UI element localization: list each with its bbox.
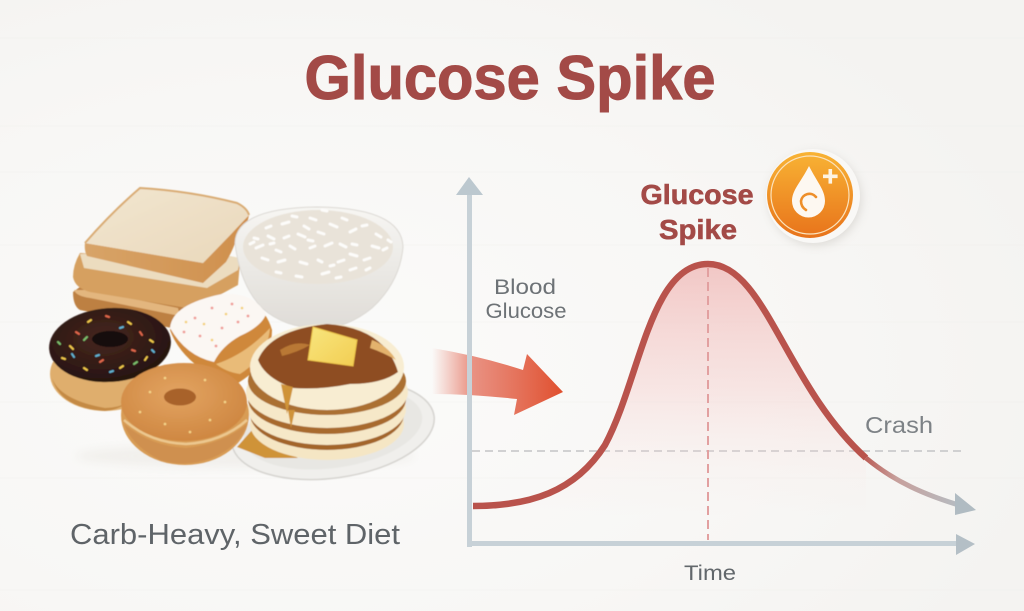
food illustration: carb-heavy foods [47, 188, 441, 492]
syrup on top [258, 324, 398, 388]
title: Glucose Spike [304, 44, 716, 113]
icon: glucose drop badge [766, 149, 861, 245]
peak dashed line [707, 268, 709, 540]
label: Glucose Spike peak: Glucose [640, 179, 754, 210]
chart: blood glucose curve [456, 177, 976, 585]
food: glazed donut [121, 363, 249, 465]
food: sprinkled white donut [170, 294, 272, 383]
food: stacked bread slices [73, 188, 249, 329]
food: bowl of rice [235, 207, 403, 328]
arrow: food to spike [432, 348, 563, 415]
spilled syrup [237, 430, 298, 458]
crash tail [866, 458, 962, 506]
y axis [456, 177, 483, 547]
food: chocolate donut [47, 304, 173, 411]
plate [225, 368, 441, 492]
label: Blood Glucose: Glucose [486, 300, 566, 323]
label: Glucose Spike peak: Spike [659, 214, 737, 245]
baseline dashed [472, 450, 965, 452]
food: pancakes on plate [225, 324, 441, 492]
label: Glucose Spike peak [640, 179, 754, 245]
food shadow [75, 444, 415, 468]
label: Time: Time [684, 562, 736, 585]
butter pat [308, 327, 357, 366]
label: Blood Glucose [486, 276, 566, 323]
caption: Carb-Heavy, Sweet Diet: Carb-Heavy, Sweet Diet [70, 519, 400, 551]
label: Crash: Crash [865, 412, 933, 438]
x axis [467, 534, 975, 555]
pancake stack [250, 388, 404, 460]
area under curve [473, 264, 866, 541]
glucose curve [473, 264, 866, 506]
label: Blood Glucose: Blood [494, 276, 556, 299]
